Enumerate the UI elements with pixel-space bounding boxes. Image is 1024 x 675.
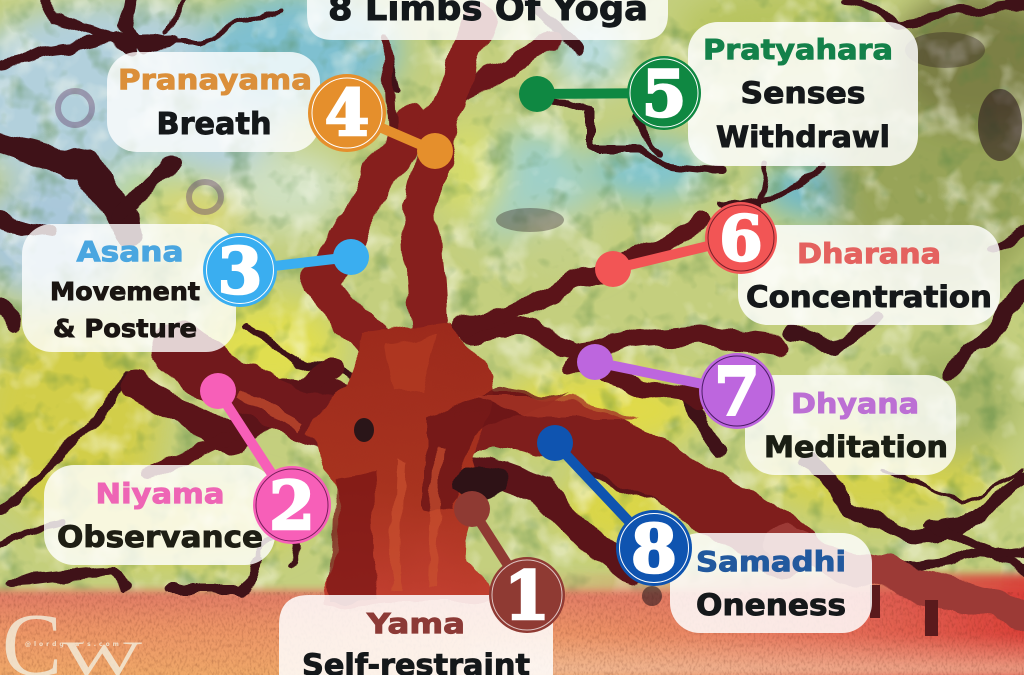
marker 4: 4 <box>325 76 369 151</box>
panel: 5 Pratyahara: Withdrawl <box>716 120 890 154</box>
panel: 6 Dharana <box>738 225 1000 325</box>
panel: 7 Dhyana <box>745 375 956 475</box>
label: Observance: Observance <box>57 520 263 554</box>
marker 1 <box>454 491 565 635</box>
marker 3: 3 <box>218 234 262 309</box>
panel: 5 Pratyahara <box>688 22 918 166</box>
panel: 4 Pranayama <box>107 52 320 152</box>
panel: 2 Niyama: Niyama <box>96 477 224 510</box>
panel: 5 Pratyahara: Pratyahara <box>703 33 893 66</box>
marker 3 <box>203 233 369 309</box>
panel: 3 Asana: Asana <box>76 235 184 268</box>
dark knots <box>496 32 1022 606</box>
marker 6 <box>595 202 777 287</box>
marker 4 <box>308 74 453 169</box>
lower limb props <box>870 585 938 636</box>
marker 5: 5 <box>642 57 686 132</box>
marker 2 <box>200 373 331 545</box>
watermark logo <box>6 616 142 675</box>
marker 7 <box>577 344 775 431</box>
panel: 8 Samadhi: Samadhi <box>696 545 846 578</box>
ground grain <box>0 592 1024 675</box>
panel: 7 Dhyana: Meditation <box>764 430 948 464</box>
panel: 5 Pratyahara: Senses <box>740 76 866 110</box>
panel: 4 Pranayama: Breath <box>156 107 272 142</box>
panel: 7 Dhyana: Dhyana <box>791 387 919 420</box>
panel: 1 Yama: Yama <box>366 607 465 640</box>
panel: 4 Pranayama: Pranayama <box>118 63 312 96</box>
panel: 3 Asana: Movement <box>50 277 200 306</box>
marker 1: 1 <box>504 557 550 635</box>
panel: 8 Samadhi: Oneness <box>696 588 846 622</box>
panel: 6 Dharana: Dharana <box>797 237 941 270</box>
foliage swirls <box>58 91 221 212</box>
panel: 2 Niyama <box>44 465 275 565</box>
trunk hollow <box>354 418 374 442</box>
panel: 3 Asana: & Posture <box>53 314 197 343</box>
panel: 3 Asana <box>22 224 236 352</box>
panel: 1 Yama <box>279 595 553 675</box>
marker 8: 8 <box>631 510 677 588</box>
marker 8 <box>537 425 692 588</box>
ground <box>0 574 1024 675</box>
marker 7: 7 <box>714 353 760 431</box>
marker 6: 6 <box>719 202 763 275</box>
watermark logo: @lordgwa's.com <box>25 641 122 648</box>
marker 5 <box>519 56 701 132</box>
panel: title <box>307 0 668 40</box>
marker 2: 2 <box>269 467 315 545</box>
trunk <box>240 322 640 605</box>
panel: 8 Samadhi <box>670 533 872 633</box>
panel: 6 Dharana: Concentration <box>746 280 992 314</box>
